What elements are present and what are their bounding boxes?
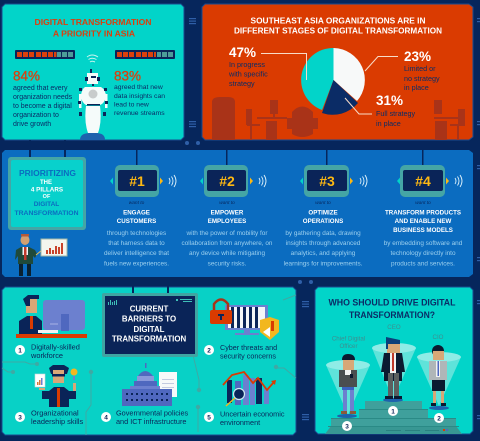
title box: prioritizing xyxy=(8,157,86,230)
panel: digital transformation priority xyxy=(2,4,184,140)
heading: stages: SOUTHEAST ASIA ORGANIZATIONS ARE IN xyxy=(250,16,426,26)
stat 47 percent xyxy=(228,45,268,88)
leader lines xyxy=(261,54,398,114)
progress bar 84 xyxy=(15,50,75,59)
item 5 label xyxy=(204,410,285,427)
podium xyxy=(325,401,462,434)
pillar 2: security risks. xyxy=(208,260,247,268)
icon: workforce xyxy=(16,295,87,338)
spotlight: chief digital officer xyxy=(326,360,370,415)
pillar 1: fuels new experiences. xyxy=(104,260,169,268)
pillar 1: ENGAGE xyxy=(123,210,150,216)
barrier box: DIGITAL xyxy=(134,325,165,334)
pillar 4: AND ENABLE NEW xyxy=(395,218,452,225)
furniture silhouettes xyxy=(212,97,465,140)
item 4 label: and ICT infrastructure xyxy=(116,417,186,426)
item 5 label: environment xyxy=(220,418,260,427)
chief digital officer label: Officer xyxy=(339,343,358,350)
heading: stages: DIFFERENT STAGES OF DIGITAL TRANSFORMATION xyxy=(234,26,442,36)
item 3 label: 3 xyxy=(18,414,22,422)
pie chart xyxy=(301,48,365,115)
text: 83 percent description: lead to new xyxy=(114,102,149,108)
item 2 label xyxy=(204,343,277,360)
pillar 4: by embedding software and xyxy=(384,240,463,247)
badge #2: #2 xyxy=(219,173,235,189)
badge #3: #3 xyxy=(319,173,335,189)
item 4 label: 4 xyxy=(104,414,108,422)
pillar 2: want to xyxy=(219,200,235,206)
panel: who should drive xyxy=(315,287,473,434)
item 5 label: Uncertain economic xyxy=(220,410,285,418)
pillar 2: EMPOWER xyxy=(211,210,244,216)
title box: prioritizing: PRIORITIZING xyxy=(19,169,76,178)
icon: robot xyxy=(78,69,108,140)
pillar 3 xyxy=(284,165,367,268)
item 3 label: Organizational xyxy=(31,408,79,418)
heading: priority in Asia: DIGITAL TRANSFORMATION xyxy=(35,17,151,27)
pillar 4: want to xyxy=(415,200,431,206)
pillar 3: OPTIMIZE xyxy=(308,210,338,216)
pillar 3: OPERATIONS xyxy=(303,218,343,225)
title box: prioritizing: 4 PILLARS xyxy=(31,186,63,194)
item 5 label: 5 xyxy=(207,414,211,422)
stat 83 percent: 83% xyxy=(114,68,141,84)
stat 47 percent: In progress xyxy=(229,60,265,69)
pillar 3: learnings for improvements. xyxy=(284,260,363,268)
pillar 4: TRANSFORM PRODUCTS xyxy=(385,210,461,216)
text: 84 percent description: to become a digital xyxy=(13,103,72,110)
rank 2: 2 xyxy=(437,416,441,422)
stat 47 percent: with specific xyxy=(228,70,268,78)
stat 23 percent: in place xyxy=(404,83,429,92)
pillar 4 xyxy=(384,165,463,268)
text: 84 percent description: drive growth xyxy=(13,121,51,128)
pillar 4: technology directly into xyxy=(390,250,456,257)
pillar 2: any device while mitigating xyxy=(189,250,265,257)
pillar 1 xyxy=(104,165,176,268)
icon: leadership xyxy=(35,365,78,407)
title box: prioritizing: THE xyxy=(40,180,52,186)
pillar 4: products and services. xyxy=(391,260,455,268)
rank 2 xyxy=(434,413,444,423)
figure: CIO xyxy=(429,345,449,410)
item 2 label: security concerns xyxy=(220,352,276,360)
barrier box: CURRENT xyxy=(130,304,168,314)
spotlight: CEO xyxy=(372,343,416,400)
rank 3: 3 xyxy=(345,424,349,430)
item 4 label xyxy=(101,408,189,426)
stat 31 percent: in place xyxy=(376,119,401,128)
item 1 label xyxy=(15,342,80,360)
stat 47 percent: 47% xyxy=(229,45,256,60)
heading: who should drive: TRANSFORMATION? xyxy=(349,310,435,320)
item 2 label: 2 xyxy=(207,348,211,354)
title box: prioritizing: DIGITAL xyxy=(34,201,59,208)
heading: who should drive: WHO SHOULD DRIVE DIGITAL xyxy=(328,298,456,308)
text: 83 percent description: agreed that new xyxy=(114,84,163,91)
icon: cyber threats xyxy=(210,300,279,340)
stat 31 percent: 31% xyxy=(376,93,403,108)
chief digital officer label: Chief Digital xyxy=(332,336,365,342)
circuit traces xyxy=(2,295,296,435)
rank 1 xyxy=(388,406,398,416)
barrier box: TRANSFORMATION xyxy=(112,334,186,344)
CIO label: CIO xyxy=(432,334,444,341)
pillar 1: want to xyxy=(129,200,145,206)
text: 83 percent description: data insights can xyxy=(114,93,165,100)
stat 47 percent: strategy xyxy=(229,79,255,88)
stat 23 percent: Limited or xyxy=(404,64,436,73)
text: 84 percent description: agreed that every xyxy=(13,85,68,92)
panel: barriers xyxy=(2,284,296,435)
item 3 label xyxy=(15,408,83,426)
barrier box: BARRIERS TO xyxy=(122,314,176,324)
icon: economy chart xyxy=(223,372,276,406)
pillar 2: collaboration from anywhere, on xyxy=(182,240,273,247)
text: 84 percent description: organization needs xyxy=(13,94,73,101)
text: 84 percent description: organization to xyxy=(13,112,59,119)
CEO label: CEO xyxy=(387,324,401,331)
pillar 1: through technologies xyxy=(107,230,166,237)
item 1 label: workforce xyxy=(30,351,63,360)
stat 31 percent xyxy=(376,93,416,128)
pillar 2: EMPLOYEES xyxy=(208,218,246,225)
stat 23 percent xyxy=(404,49,440,92)
stat 84 percent: 84% xyxy=(13,68,40,84)
icon: presenter with chart xyxy=(15,234,67,276)
rank 3 xyxy=(342,421,352,431)
figure: chief digital officer xyxy=(337,354,357,418)
barrier box xyxy=(102,284,198,357)
pillar 3: insights through advanced xyxy=(286,240,361,247)
heading: priority in Asia: A PRIORITY IN ASIA xyxy=(53,28,135,38)
item 2 label: Cyber threats and xyxy=(220,343,277,352)
pillar 2 xyxy=(182,165,273,268)
item 3 label: leadership skills xyxy=(31,417,83,426)
text: 83 percent description: revenue streams xyxy=(114,110,165,117)
pillar 1: that harness data to xyxy=(108,240,165,247)
rank 1: 1 xyxy=(391,408,395,416)
stat 31 percent: Full strategy xyxy=(376,109,416,118)
title box: prioritizing: TRANSFORMATION xyxy=(14,210,79,217)
stat 23 percent: no strategy xyxy=(404,74,440,83)
pillar 3: want to xyxy=(315,200,331,206)
panel: four pillars xyxy=(2,140,473,277)
icon: wifi signal xyxy=(87,55,98,62)
pillar 1: CUSTOMERS xyxy=(117,218,156,225)
icon: government building xyxy=(122,363,177,406)
item 4 label: Governmental policies xyxy=(116,408,189,418)
figure: CEO xyxy=(381,337,405,402)
pillar 1: deliver intelligence that xyxy=(104,250,169,257)
item 1 label: 1 xyxy=(18,348,22,354)
pillar 2: with the power of mobility for xyxy=(186,230,268,237)
badge #4: #4 xyxy=(415,173,431,189)
progress bar 83 xyxy=(115,50,175,59)
stat 23 percent: 23% xyxy=(404,49,431,64)
panel: southeast asia stages xyxy=(202,4,473,140)
pillar 3: analytics, and applying xyxy=(291,250,356,257)
badge #1: #1 xyxy=(129,173,145,189)
title box: prioritizing: OF xyxy=(43,194,51,200)
spotlight: CIO xyxy=(417,352,461,406)
pillar 3: by gathering data, drawing xyxy=(285,230,361,237)
pillar 4: BUSINESS MODELS xyxy=(393,227,453,234)
item 1 label: Digitally-skilled xyxy=(31,342,80,352)
